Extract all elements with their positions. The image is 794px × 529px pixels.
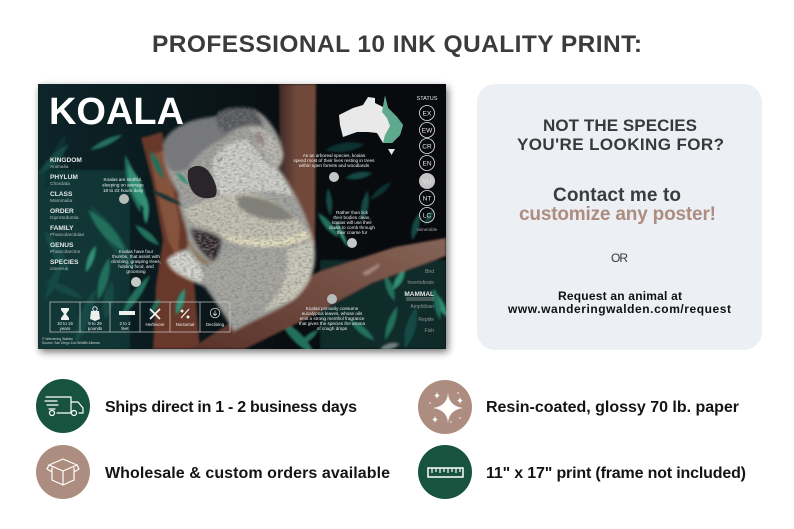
or divider text: OR: [611, 251, 628, 265]
paper text: Resin-coated, glossy 70 lb. paper: [486, 399, 739, 416]
stat boxes: Nocturnal: [176, 322, 194, 327]
fact: fur: Rather than lick: [336, 210, 369, 215]
fact: sleep: 18 to 22 hours daily: [103, 188, 144, 193]
fact: diet: of cough drops: [317, 326, 348, 331]
range map: Australia: [339, 96, 403, 155]
conservation status scale: EN: [422, 160, 432, 168]
animal class list: Bird: [425, 269, 434, 275]
panel heading: NOT THE SPECIES: [543, 116, 697, 135]
poster credits: Source: San Diego Zoo Wildlife Alliance: [42, 341, 100, 345]
panel heading: YOU'RE LOOKING FOR?: [517, 135, 724, 154]
contact text: customize any poster!: [519, 204, 716, 225]
taxonomy list: cinereus: [50, 266, 69, 272]
conservation status scale: LC: [423, 212, 431, 220]
request link: www.wanderingwalden.com/request: [507, 302, 731, 316]
taxonomy list: CLASS: [50, 191, 73, 198]
request link: Request an animal at: [558, 289, 682, 303]
feature: print size: [418, 445, 746, 499]
animal class list: Invertebrate: [407, 280, 434, 286]
shipping text: Ships direct in 1 - 2 business days: [105, 399, 357, 416]
fact: diet: eucalyptus leaves, whose oils: [302, 311, 363, 316]
panel heading: [517, 116, 724, 154]
koala ear: [217, 108, 262, 133]
vertical tree trunk: [279, 84, 316, 245]
koala nose: [188, 166, 217, 198]
title: PROFESSIONAL 10 INK QUALITY PRINT:: [152, 31, 642, 58]
taxonomy list: Diprotodontia: [50, 215, 79, 221]
feature: shipping: [36, 379, 357, 433]
taxonomy list: [50, 157, 84, 272]
fact: thumbs: grooming: [126, 269, 146, 274]
feature: wholesale: [36, 445, 390, 499]
fact: sleep: sleeping on average: [102, 182, 144, 188]
taxonomy list: PHYLUM: [50, 174, 78, 181]
koala face: [213, 140, 293, 197]
conservation status scale: vulnerable: [417, 227, 438, 232]
icon: ruler: [428, 468, 463, 477]
fact: thumbs: holding food, and: [118, 264, 154, 269]
fact: sleep: Koalas are slothful,: [103, 177, 143, 182]
conservation status scale: VU: [422, 178, 432, 186]
fact: fur: their coarse fur: [337, 230, 368, 235]
diagonal tree trunk: [141, 132, 200, 349]
poster photo: [35, 84, 451, 359]
request link: [507, 289, 731, 316]
stat boxes: 9 to 29: [88, 321, 102, 326]
koala silhouette: [163, 108, 315, 332]
fact: sleep: [102, 177, 144, 204]
background foliage: [35, 84, 451, 359]
fact: thumbs: [111, 249, 161, 287]
taxonomy list: KINGDOM: [50, 157, 82, 164]
fact: diet: Koalas primarily consume: [306, 306, 359, 311]
stat boxes: 2 to 3: [120, 321, 131, 326]
stat boxes: Declining: [206, 322, 225, 327]
animal class list: Reptile: [418, 317, 434, 323]
fact: arboreal: spend most of their lives resting in trees: [294, 158, 375, 163]
fact: diet: that gives the species the aroma: [299, 321, 366, 326]
animal class list: Fish: [425, 328, 434, 334]
koala leg: [203, 250, 285, 310]
koala belly gap: [190, 228, 222, 262]
conservation status scale: [417, 96, 438, 232]
poster title: KOALA: KOALA: [49, 91, 184, 133]
conservation status scale: NT: [423, 196, 431, 202]
taxonomy list: Mammalia: [50, 198, 72, 204]
fact: fur: [329, 210, 375, 248]
koala: [163, 108, 315, 332]
poster credits: © Wandering Walden: [42, 337, 73, 341]
fact: fur: claws to comb through: [329, 225, 375, 230]
stat boxes: feet: [121, 326, 129, 331]
stat boxes: years: [60, 326, 71, 331]
stat boxes: 10 to 15: [57, 321, 73, 326]
taxonomy list: Animalia: [50, 164, 69, 170]
poster credits: [42, 337, 100, 345]
taxonomy list: SPECIES: [50, 259, 79, 266]
poster: koala infographic: [35, 84, 451, 359]
panel: custom request: [477, 84, 762, 350]
icon: box: [47, 459, 79, 485]
fact: diet: emit a strong menthol fragrance: [300, 316, 365, 321]
conservation status scale: CR: [422, 144, 432, 150]
fact: thumbs: thumbs, that assist with: [112, 254, 160, 259]
taxonomy list: GENUS: [50, 242, 74, 249]
poster shadow: [40, 87, 448, 352]
animal class list: [404, 269, 434, 334]
taxonomy list: Chordata: [50, 181, 70, 187]
stat boxes: Herbivore: [145, 322, 165, 327]
contact text: [519, 185, 716, 225]
foreground leaves: [147, 149, 190, 316]
fact: fur: their bodies clean,: [333, 215, 371, 220]
stat boxes: pounds: [88, 326, 103, 331]
conservation status scale: EW: [422, 128, 433, 134]
fact: diet: [299, 294, 366, 331]
taxonomy list: Phascolarctos: [50, 249, 81, 255]
fact: fur: koalas will use their: [332, 220, 372, 225]
koala paw: [167, 251, 203, 283]
taxonomy list: ORDER: [50, 208, 74, 215]
print size text: 11" x 17" print (frame not included): [486, 465, 746, 482]
conservation status scale: STATUS: [417, 96, 438, 102]
fact: arboreal: within open forests and woodlands: [299, 163, 370, 168]
animal class list: MAMMAL: [404, 291, 434, 298]
koala cream fur edge: [217, 230, 312, 247]
animal class list: Amphibian: [410, 304, 434, 310]
wholesale text: Wholesale & custom orders available: [105, 465, 390, 482]
stat boxes: [50, 302, 230, 332]
koala arm: [183, 192, 307, 243]
feature: paper: [418, 380, 739, 434]
contact text: Contact me to: [553, 185, 681, 206]
taxonomy list: FAMILY: [50, 225, 74, 232]
fact: arboreal: [294, 153, 375, 182]
conservation status scale: EX: [423, 110, 432, 118]
fact: arboreal: As an arboreal species, koalas: [303, 153, 366, 158]
icon: sparkle: [429, 392, 463, 423]
taxonomy list: Phascolarctidae: [50, 232, 84, 238]
koala head top: [163, 108, 265, 172]
icon: truck: [45, 397, 83, 416]
branch: [190, 238, 446, 349]
fact: thumbs: climbing, grasping trees,: [111, 259, 161, 264]
fact: thumbs: Koalas have four: [119, 249, 154, 254]
